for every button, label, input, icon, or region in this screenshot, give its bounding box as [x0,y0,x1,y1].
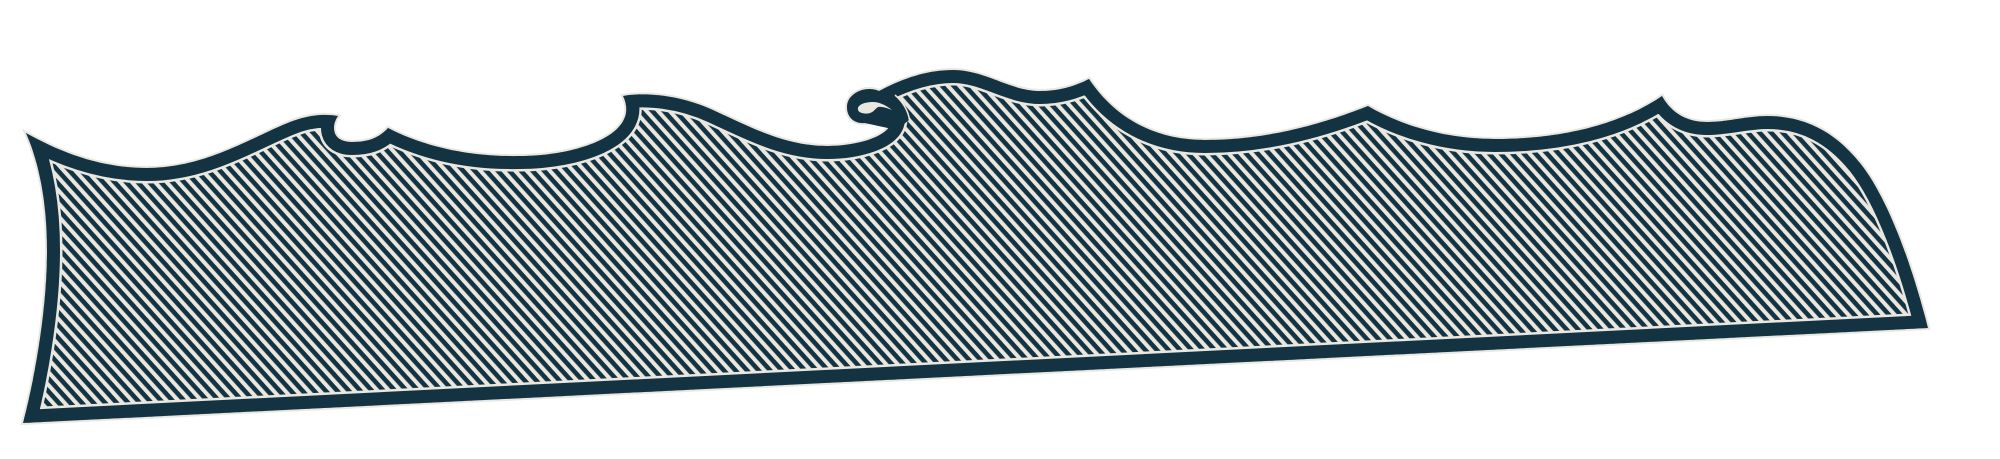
wave banner illustration [20,68,1930,425]
curl of the cresting wave [855,92,910,130]
wave shape [23,70,1928,423]
inner cream border and navy band [23,70,1928,423]
outer cream outline [23,70,1928,423]
diagonal hatch fill [23,70,1928,423]
